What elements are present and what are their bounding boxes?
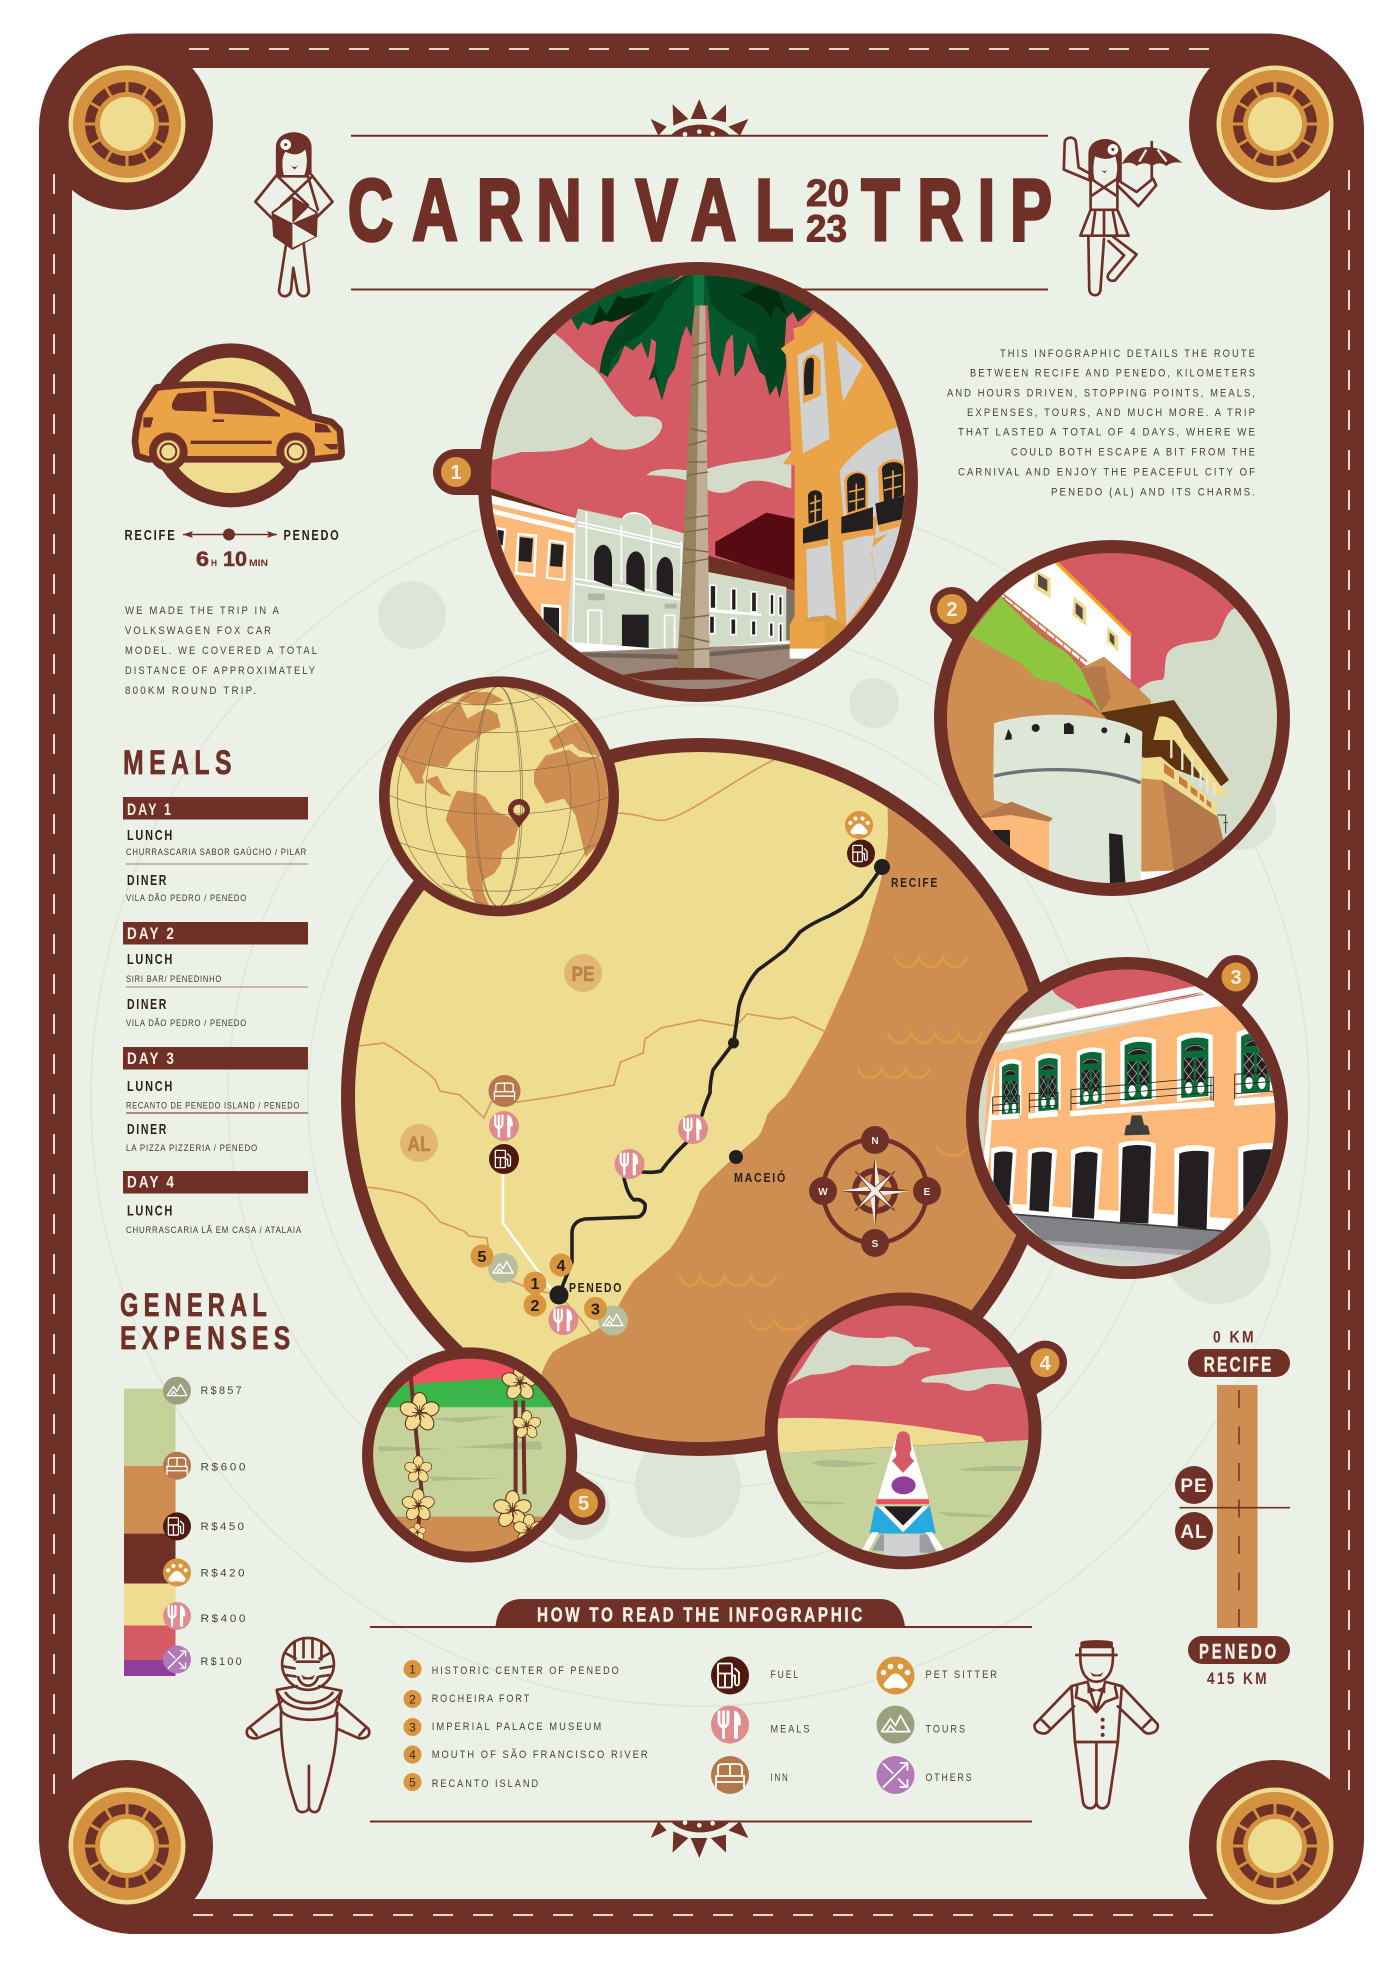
palm fronds [571, 276, 682, 330]
tab 4: 4 [1039, 1353, 1051, 1375]
intro paragraph: EXPENSES, TOURS, AND MUCH MORE. A TRIP [967, 407, 1257, 419]
state marker PE [564, 954, 602, 992]
day 2: DINER [127, 996, 168, 1013]
corner wheel: top right [1189, 38, 1361, 210]
title [348, 162, 1052, 260]
day 3: DAY 3 [127, 1049, 176, 1068]
location pin [508, 799, 530, 828]
intro paragraph: COULD BOTH ESCAPE A BIT FROM THE [1011, 446, 1257, 458]
map [348, 745, 1060, 1460]
tab 3: 3 [1230, 967, 1242, 989]
day 4: DAY 4 [127, 1172, 176, 1192]
figure: left costumed character [247, 1638, 369, 1812]
pill Penedo [1188, 1636, 1290, 1664]
compass [809, 1126, 941, 1257]
legend: numbered places: ROCHEIRA FORT [432, 1693, 531, 1705]
day 1: VILA DÃO PEDRO / PENEDO [126, 893, 247, 904]
route line [559, 867, 882, 1295]
tab 3 [1210, 962, 1250, 1010]
expenses heading [120, 1287, 296, 1356]
palm trunk [677, 305, 700, 668]
photo 4: river mouth [765, 1292, 1060, 1570]
intro paragraph: BETWEEN RECIFE AND PENEDO, KILOMETERS [970, 368, 1257, 380]
expense icons and values: R$450 [200, 1521, 246, 1533]
day 4: LUNCH [127, 1202, 174, 1220]
photo 2: rocheira fort [934, 540, 1290, 896]
car description [125, 605, 319, 697]
state badge AL [1175, 1512, 1213, 1550]
state borders [359, 758, 826, 1334]
distance road: 415 KM [1207, 1669, 1269, 1688]
car badge [138, 343, 338, 507]
city labels: PENEDO [569, 1280, 623, 1295]
numbered map badges: 3 [591, 1302, 600, 1318]
day 2: SIRI BAR/ PENEDINHO [126, 974, 222, 985]
state marker PE: PE [572, 963, 594, 986]
day 1: DINER [127, 872, 168, 889]
intro paragraph: THIS INFOGRAPHIC DETAILS THE ROUTE [1000, 348, 1257, 360]
route label: RECIFE [124, 527, 176, 544]
day 1: LUNCH [127, 827, 174, 844]
corner wheel: top left [41, 38, 213, 210]
legend: icon key: INN [770, 1772, 790, 1784]
legend header: HOW TO READ THE INFOGRAPHIC [537, 1604, 865, 1626]
museum [566, 509, 685, 650]
distance road [1175, 1328, 1290, 1688]
expenses stacked bar [124, 1377, 248, 1676]
car description: WE MADE THE TRIP IN A [125, 605, 281, 617]
car description: MODEL. WE COVERED A TOTAL [125, 645, 319, 657]
icon: sun top [651, 99, 748, 137]
day 1 [123, 797, 308, 904]
background rings and faint dots [91, 488, 1309, 1706]
day 4 [123, 1171, 308, 1236]
legend: numbered places: 4 [409, 1748, 416, 1762]
numbered map badges: 2 [531, 1298, 540, 1315]
day 3: DINER [127, 1121, 168, 1138]
church [780, 312, 905, 656]
pill Recife [1188, 1349, 1290, 1377]
expenses heading: GENERAL [120, 1287, 272, 1323]
route label [124, 527, 340, 571]
state marker AL: AL [408, 1133, 431, 1156]
numbered map badges: 5 [478, 1249, 487, 1266]
car description: DISTANCE OF APPROXIMATELY [125, 665, 317, 677]
day 2: LUNCH [127, 951, 174, 968]
tab 5 [550, 1480, 598, 1518]
title: CARNIVAL [348, 162, 794, 260]
legend: numbered places: HISTORIC CENTER OF PENEDO [432, 1665, 621, 1677]
expense icons and values: R$400 [200, 1613, 248, 1625]
city dots [550, 859, 890, 1304]
white side road [503, 1173, 551, 1289]
legend: icon key [711, 1656, 999, 1794]
windows [999, 1027, 1274, 1120]
state badge PE [1175, 1466, 1213, 1504]
orange house [491, 495, 578, 645]
city labels: MACEIÓ [734, 1170, 787, 1185]
legend: numbered places: 1 [409, 1662, 416, 1676]
route label: 6 [196, 548, 209, 571]
route label: MIN [249, 558, 268, 568]
photo 5: recanto island [362, 1347, 598, 1563]
tab 2 [937, 594, 985, 640]
route label: H [211, 558, 217, 568]
title rules [351, 136, 1048, 290]
back buildings [715, 513, 795, 580]
pill Penedo: PENEDO [1199, 1641, 1279, 1664]
tab 4 [1010, 1348, 1060, 1385]
day 3 [123, 1047, 308, 1154]
legend: numbered places: MOUTH OF SÃO FRANCISCO RIVER [432, 1748, 650, 1761]
photo 3: imperial palace museum [966, 957, 1288, 1279]
car description: 800KM ROUND TRIP. [125, 685, 258, 697]
expense icons and values: R$100 [200, 1656, 244, 1668]
legend: icon key: OTHERS [926, 1772, 974, 1784]
expense icons and values: R$420 [200, 1567, 247, 1579]
day 2: VILA DÃO PEDRO / PENEDO [126, 1018, 247, 1029]
city labels [569, 875, 939, 1295]
compass: E [924, 1187, 931, 1198]
legend: icon key: TOURS [926, 1724, 967, 1736]
compass: W [818, 1187, 828, 1198]
day 4: CHURRASCARIA LÃ EM CASA / ATALAIA [126, 1225, 302, 1236]
compass: S [872, 1239, 879, 1250]
intro paragraph: AND HOURS DRIVEN, STOPPING POINTS, MEALS, [947, 388, 1257, 400]
day 1: CHURRASCARIA SABOR GAÚCHO / PILAR [126, 847, 307, 858]
meals list [123, 797, 308, 1236]
legend: numbered places: IMPERIAL PALACE MUSEUM [432, 1721, 603, 1733]
legend bottom rule [370, 1820, 1032, 1822]
state badge PE: PE [1180, 1476, 1208, 1497]
state badge AL: AL [1180, 1522, 1208, 1543]
day 3: LA PIZZA PIZZERIA / PENEDO [126, 1143, 258, 1154]
corner wheel: bottom left [41, 1760, 213, 1932]
intro paragraph: PENEDO (AL) AND ITS CHARMS. [1051, 486, 1257, 498]
dancer left [255, 132, 333, 296]
day 3: LUNCH [127, 1078, 174, 1095]
day 1: DAY 1 [127, 800, 173, 819]
legend: icon key: MEALS [770, 1724, 812, 1736]
globe [379, 676, 619, 916]
intro paragraph: THAT LASTED A TOTAL OF 4 DAYS, WHERE WE [958, 426, 1257, 438]
pill Recife: RECIFE [1204, 1354, 1274, 1376]
numbered map badges [470, 1244, 607, 1320]
car description: VOLKSWAGEN FOX CAR [125, 625, 273, 637]
expense icons and values [163, 1377, 248, 1674]
tab 2: 2 [946, 599, 958, 621]
corner wheel: bottom right [1189, 1760, 1361, 1932]
intro paragraph [947, 348, 1257, 498]
tab 1 [441, 457, 495, 487]
legend: numbered places: 2 [409, 1692, 416, 1706]
route label: 10 [223, 548, 247, 571]
icon: sun bottom [651, 1820, 748, 1858]
sea waves [680, 957, 982, 1330]
legend: icon key: FUEL [770, 1669, 800, 1681]
sea [541, 808, 1028, 1442]
legend header [370, 1599, 1032, 1627]
legend: numbered places: RECANTO ISLAND [432, 1778, 540, 1790]
city labels: RECIFE [891, 875, 939, 890]
legend: numbered places: 5 [409, 1776, 416, 1790]
tab 5: 5 [578, 1493, 589, 1515]
expenses heading: EXPENSES [120, 1320, 296, 1356]
doors [991, 1140, 1274, 1218]
distance road: 0 KM [1213, 1328, 1256, 1346]
meals heading: MEALS [123, 744, 237, 782]
tab 1: 1 [450, 462, 462, 484]
expense icons and values: R$600 [200, 1462, 248, 1474]
legend: numbered places: 3 [409, 1720, 416, 1734]
compass: N [871, 1136, 879, 1147]
title: 23 [806, 208, 847, 250]
numbered map badges: 4 [557, 1258, 566, 1275]
title: 20 [806, 173, 849, 215]
legend: icon key: PET SITTER [926, 1669, 999, 1681]
intro paragraph: CARNIVAL AND ENJOY THE PEACEFUL CITY OF [958, 466, 1257, 478]
photo 1: historic center [441, 262, 921, 705]
day 2: DAY 2 [127, 924, 176, 943]
legend: numbered places [404, 1660, 650, 1791]
figure: right gentleman with hat [1035, 1640, 1158, 1808]
day 3: RECANTO DE PENEDO ISLAND / PENEDO [126, 1100, 300, 1112]
day 2 [123, 922, 308, 1029]
title: TRIP [861, 162, 1052, 260]
state marker AL [400, 1124, 438, 1162]
dancer right with umbrella [1064, 138, 1183, 295]
numbered map badges: 1 [531, 1276, 540, 1293]
route label: PENEDO [284, 527, 340, 544]
map markers [488, 811, 875, 1336]
expense icons and values: R$857 [200, 1385, 244, 1397]
